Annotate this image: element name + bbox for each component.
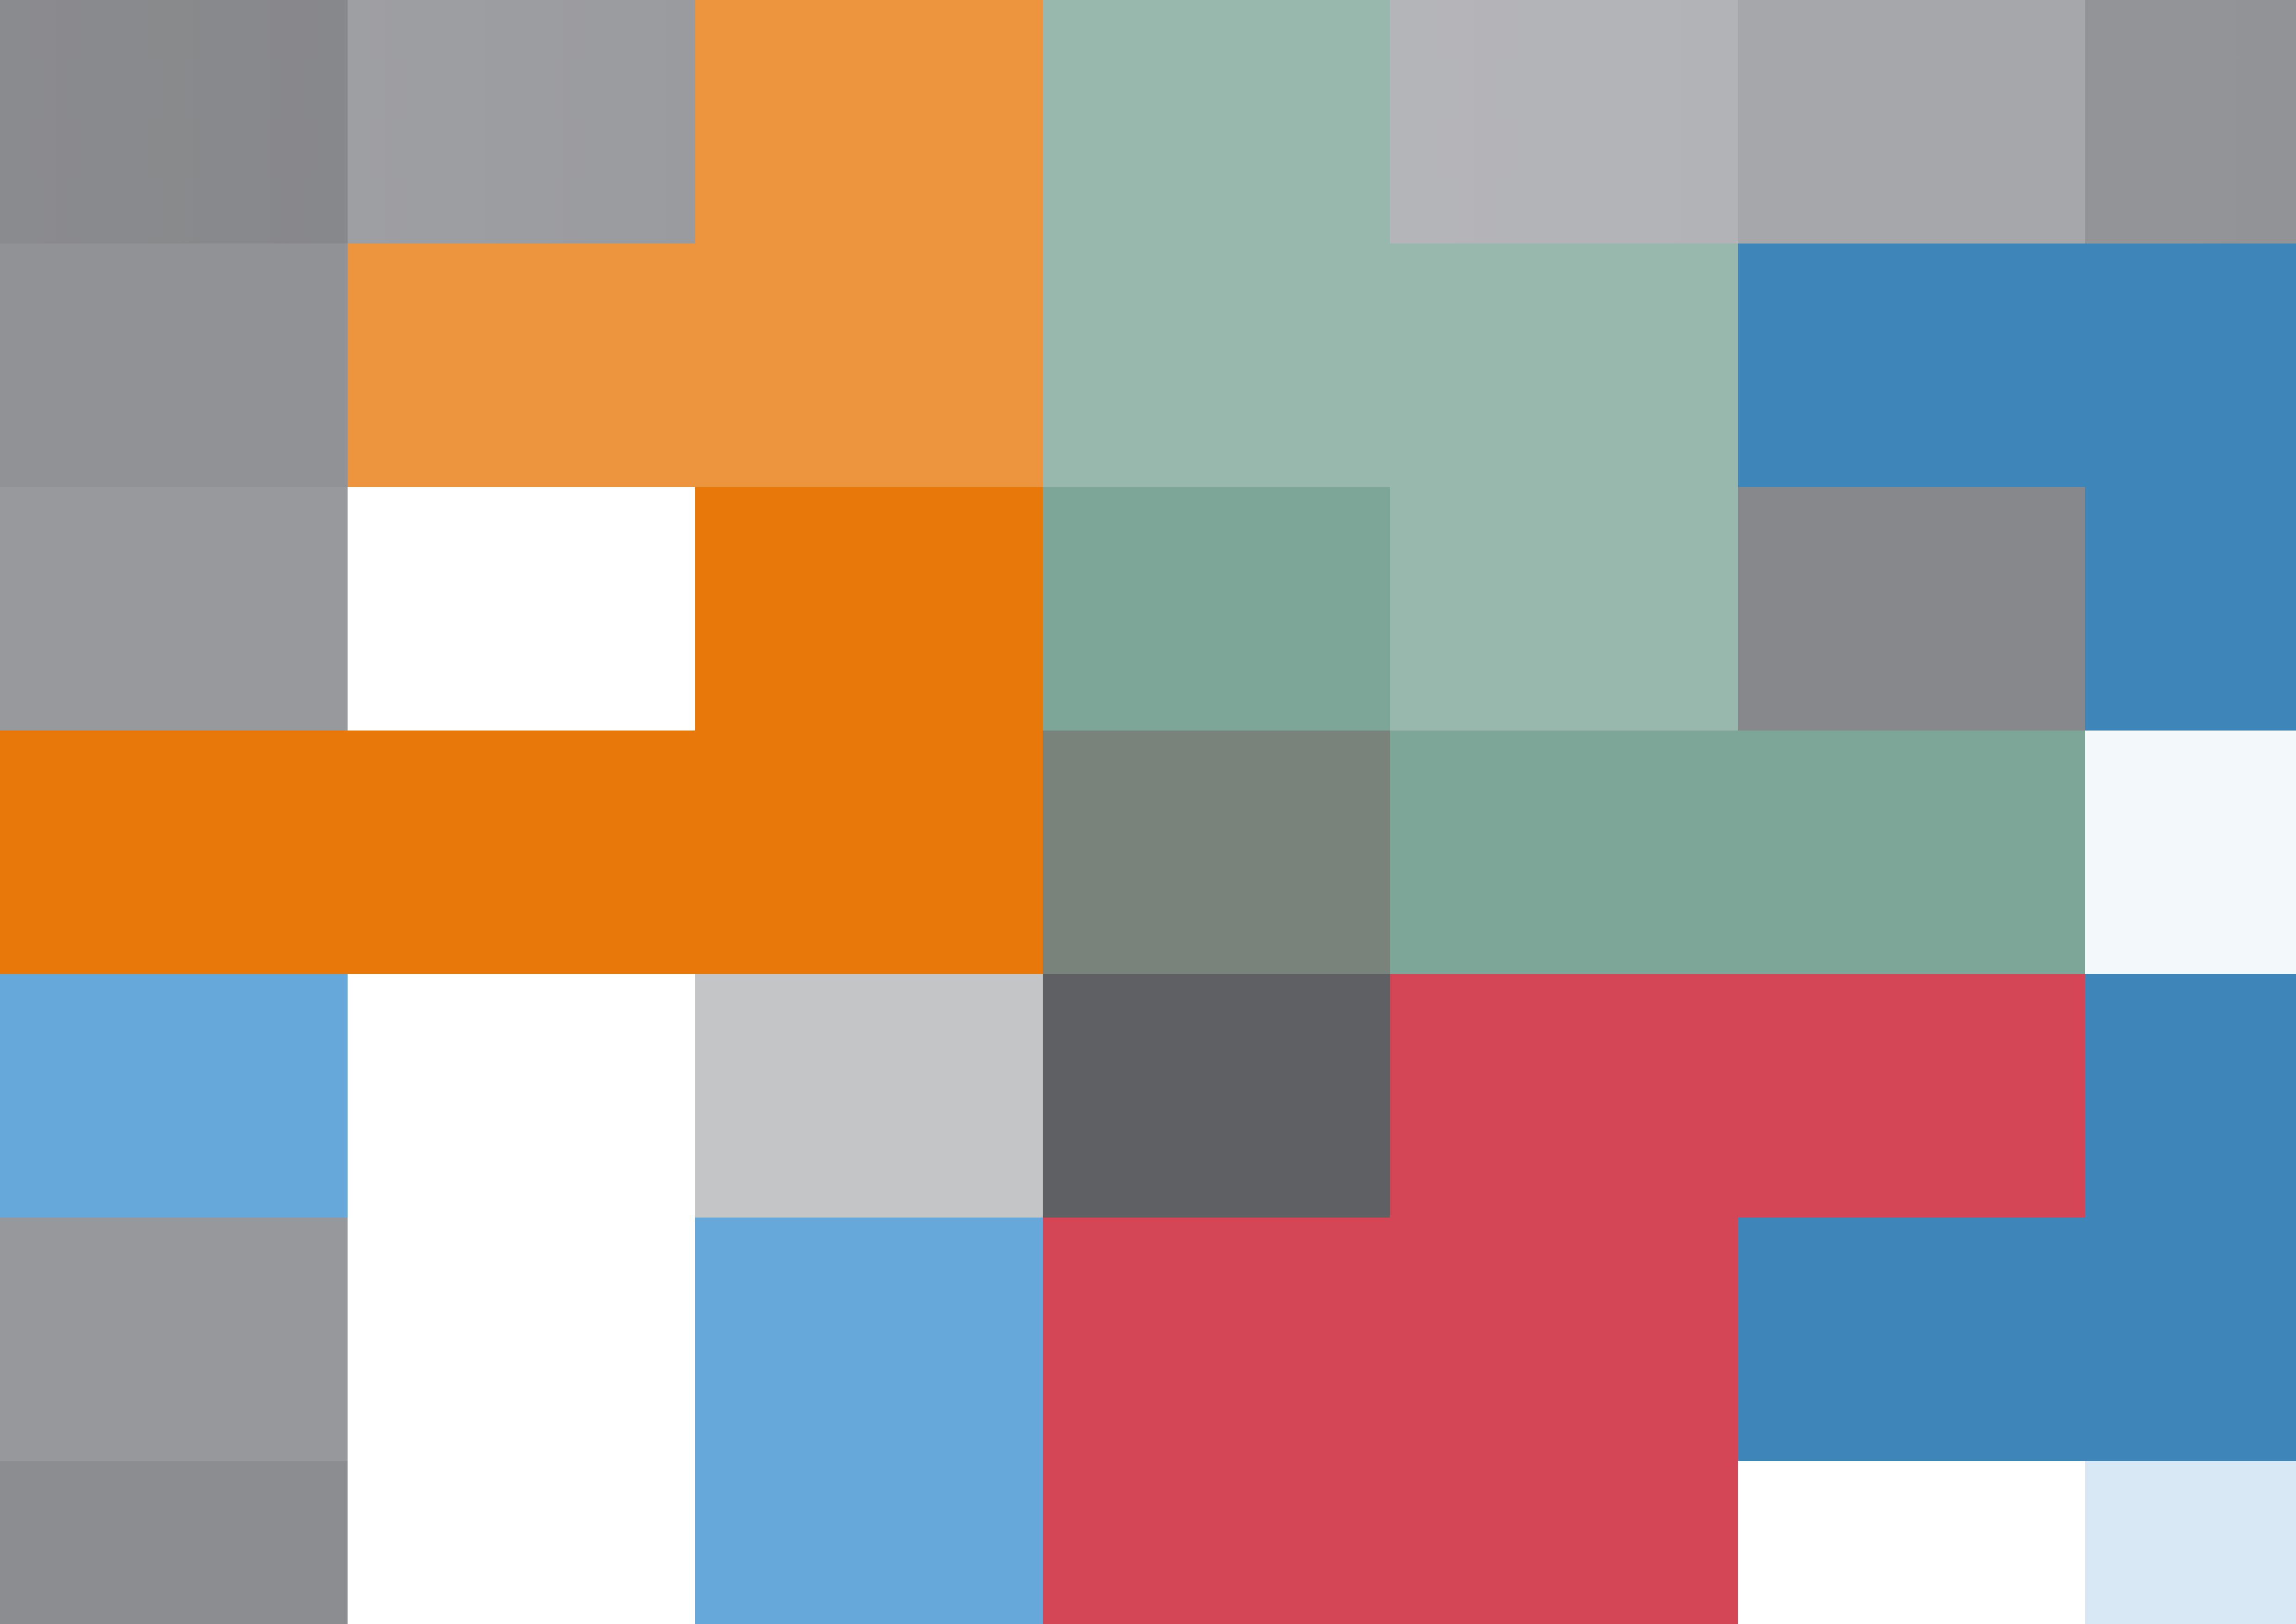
- tile: grey row 1 column 1: [0, 0, 348, 244]
- tile: pale blue row 7 column 7: [2085, 1461, 2296, 1624]
- tile: grey row 7 column 1: [0, 1461, 348, 1624]
- block: dark orange: [0, 487, 1043, 974]
- tile: grey row 1 column 6: [1738, 0, 2085, 244]
- block: lower blue: [1738, 974, 2296, 1461]
- block: light orange: [348, 0, 1043, 487]
- tile: light blue row 5 column 1: [0, 974, 348, 1218]
- tile: grey row 6 column 1: [0, 1218, 348, 1461]
- tile: dark grey row 5 column 4: [1043, 974, 1390, 1218]
- tile: light grey row 5 column 3: [695, 974, 1043, 1218]
- block: light sage: [1043, 0, 1738, 731]
- tile: grey green row 4 column 4: [1043, 731, 1390, 974]
- tile: grey row 1 column 5: [1390, 0, 1738, 244]
- tile: grey row 3 column 1: [0, 487, 348, 731]
- tile: grey row 1 column 2: [348, 0, 695, 244]
- tile: grey row 2 column 1: [0, 244, 348, 487]
- block: red: [1043, 974, 2085, 1624]
- block: light blue column 3: [695, 1218, 1043, 1624]
- tile: pale row 4 column 7: [2085, 731, 2296, 974]
- tile: grey row 1 column 7: [2085, 0, 2296, 244]
- block: dark sage row 4: [1390, 731, 2085, 974]
- tile: grey row 3 column 6: [1738, 487, 2085, 731]
- block: upper blue: [1738, 244, 2296, 731]
- tile: dark sage row 3 column 4: [1043, 487, 1390, 731]
